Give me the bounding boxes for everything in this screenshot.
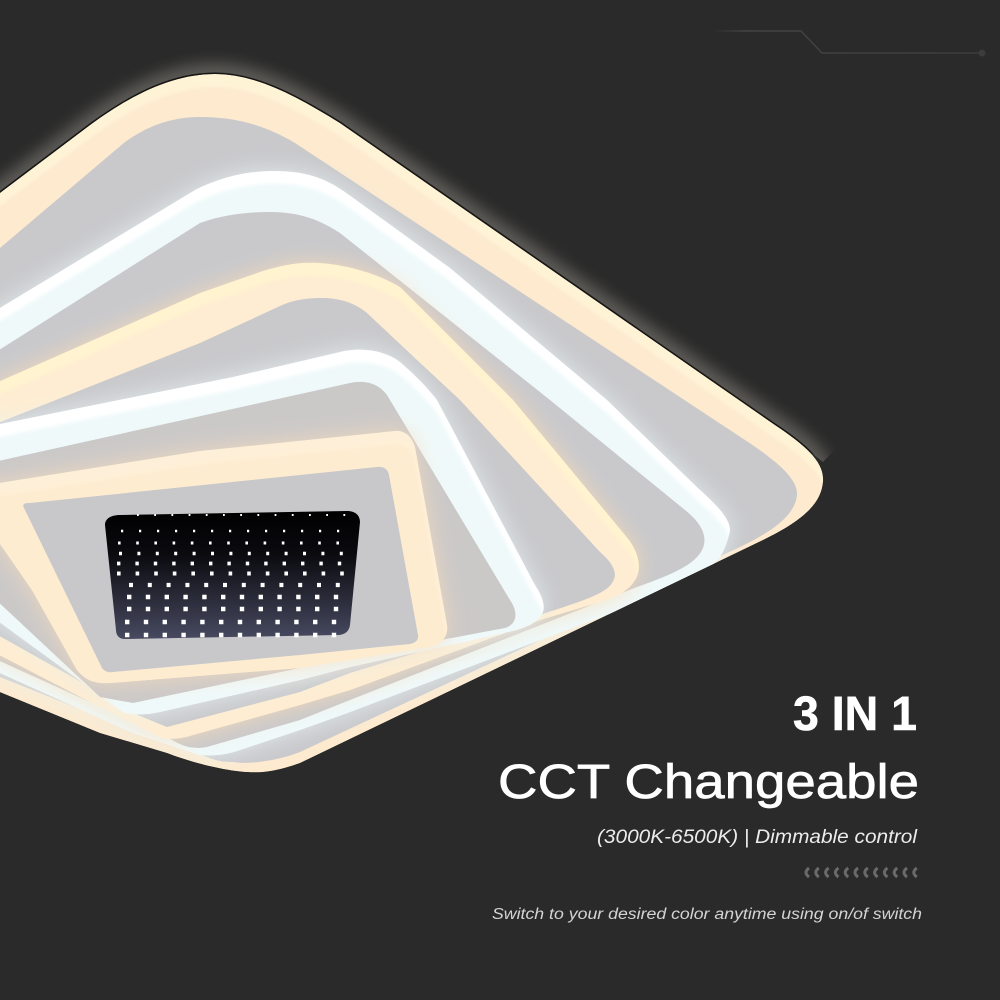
heading: 3 IN 1: 3 IN 1 [793,688,917,741]
decorative circuit line [712,31,986,56]
lamp glow on top edge [0,56,832,462]
lamp body clipped to outline [0,74,823,785]
outer panel [0,117,797,763]
third panel [0,298,615,727]
fourth panel [0,382,515,703]
second panel [0,212,704,748]
heading: CCT Changeable: CCT Changeable [498,756,919,809]
infinity mirror screen with LED dots [105,511,360,639]
description text: Switch to your desired color anytime using on/of switch [492,906,922,923]
inner panel [23,467,418,672]
chevron divider [806,868,917,877]
fourth cool ring [0,350,544,727]
subtitle: colour range and dimming: (3000K-6500K) | Dimmable control [597,827,918,848]
inner warm ring [0,431,447,696]
outer warm ring [0,74,823,785]
ceiling lamp [0,74,823,785]
third warm ring [0,263,639,752]
second cool ring [0,171,730,768]
